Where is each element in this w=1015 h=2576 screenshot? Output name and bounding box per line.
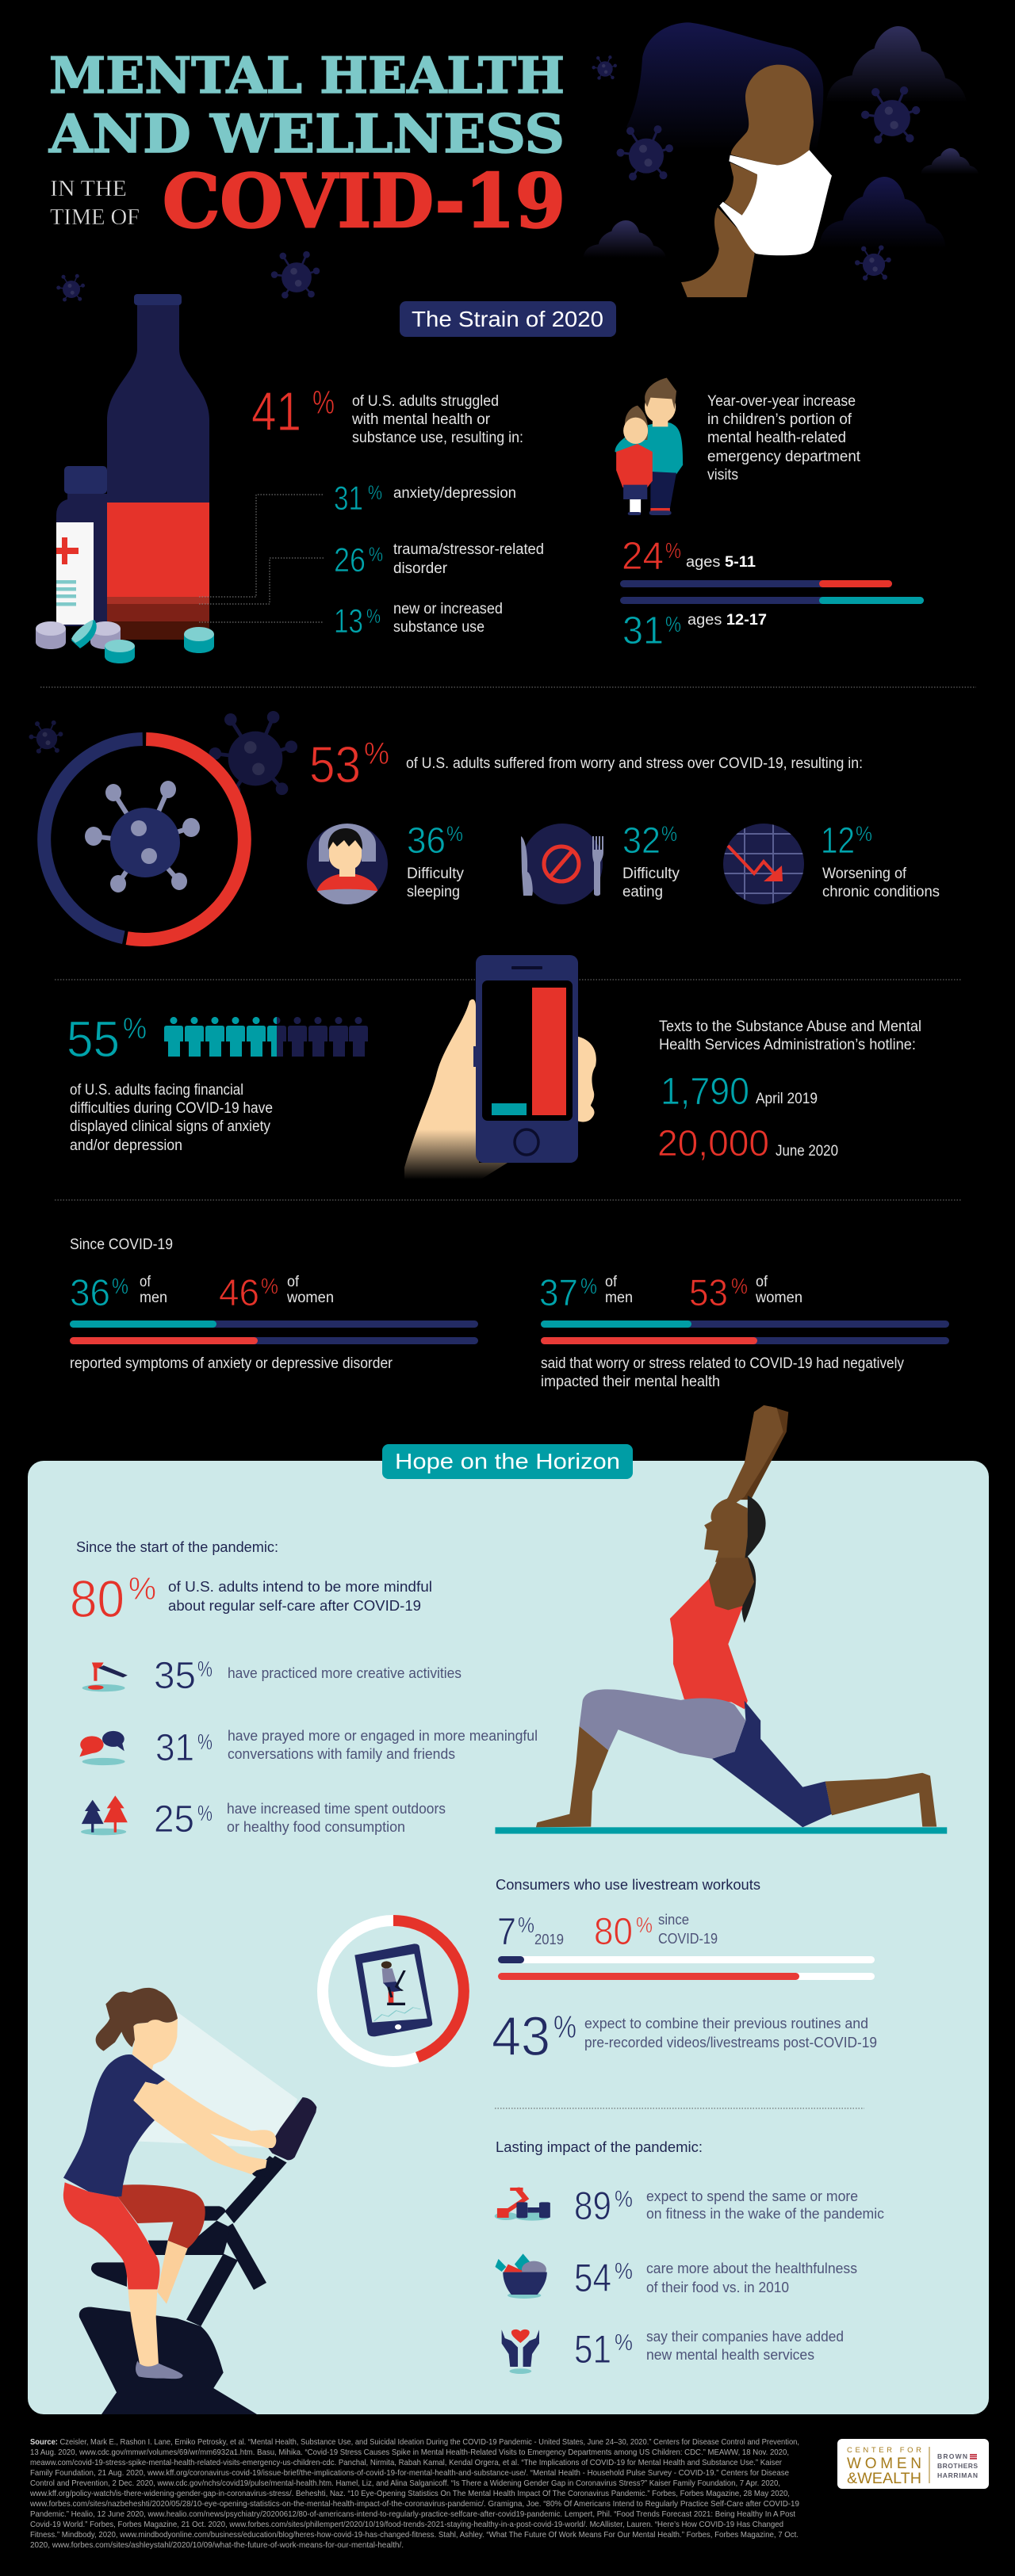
text: year-over-year increase: Year-over-year increase (707, 393, 856, 410)
stat: 51% mental health services: say their companies have added (646, 2328, 844, 2345)
stat: 43% combine routines: expect to combine their previous routines and (584, 2015, 868, 2031)
stat: 54% healthfulness of food: 54 (574, 2256, 611, 2300)
sources text block: Pandemic.” Healio, 12 June 2020, www.healio.com/news/psychiatry/20200612/80-of-americans-intend-to-regularly-practice-selfcare-after-covid19-pandemic. Lempert, Phil. “Food Trends Forecast 2021: Being Healthy In A Post (30, 2509, 795, 2519)
stat: 80% since COVID-19: 80 (594, 1911, 633, 1953)
heading: The Strain of 2020: The Strain of 2020 (412, 307, 603, 331)
stat: 24% ages 5-11: 24 (622, 535, 664, 578)
divider in panel (495, 2108, 864, 2109)
stat: 41% of adults: % (312, 384, 335, 421)
cloud upper right (825, 26, 967, 111)
wine bottle (107, 304, 209, 640)
sources text block: Covid-19 World.” Forbes, Forbes Magazine, 21 Oct. 2020, www.forbes.com/sites/phillempert/2020/10/19/food-trends-2021-staying-healthy-in-a-post-covid-19-world/. McAllister, Lauren. “Here’s How COVID-19 Has Changed (30, 2520, 783, 2529)
stat: 26% trauma: disorder (393, 560, 448, 577)
stat: 54% healthfulness of food: care more about the healthfulness (646, 2260, 857, 2276)
stat: 7% 2019: 2019 (534, 1931, 564, 1947)
stat: 43% combine routines: % (553, 2010, 576, 2045)
stat: 55% financial difficulties: of U.S. adults facing financial (70, 1082, 243, 1099)
comparison: worry or stress: said that worry or stress related to COVID-19 had negatively (541, 1355, 904, 1372)
heading: Hope on the Horizon (382, 1444, 633, 1479)
stat: 32% difficulty eating: % (661, 822, 677, 846)
stat: 7% 2019: 7 (497, 1911, 516, 1953)
stat: 80% self-care (70, 1569, 432, 1628)
stat: 36% difficulty sleeping (407, 820, 464, 900)
viruses (56, 55, 920, 301)
stat: 31% ages 12-17: ages 12-17 (688, 612, 767, 629)
icon: falling health chart (723, 824, 804, 904)
stat: 80% self-care: of U.S. adults intend to be more mindful (168, 1578, 432, 1595)
comparison: worry or stress: 53 (689, 1271, 728, 1313)
stat: 41% of adults: 41 (251, 380, 301, 442)
stat: 31% prayed or conversations (155, 1727, 538, 1769)
stat: 55% financial difficulties: 55 (67, 1011, 120, 1068)
text: since the start of the pandemic: Since the start of the pandemic: (76, 1538, 278, 1555)
stat: 41% of adults: of U.S. adults struggled (352, 393, 499, 410)
panel: Hope on the Horizon (28, 1461, 989, 2414)
stat: 53% worry and stress (309, 736, 863, 793)
stat: 26% trauma: 26 (334, 541, 366, 579)
stat: 7% 2019 (497, 1911, 564, 1953)
viruses behind ring (29, 711, 297, 797)
bar: April 2019 (492, 1103, 527, 1115)
heading: Hope on the Horizon: Hope on the Horizon (395, 1449, 620, 1473)
heading: Since COVID-19: Since COVID-19 (70, 1236, 173, 1253)
comparison: worry or stress: 37 (539, 1271, 578, 1313)
logo: Center for Women & Wealth / Brown Brothers Harriman: BROWN (937, 2452, 967, 2460)
stat: 89% fitness spending: expect to spend the same or more (646, 2188, 858, 2204)
sources text block: www.forbes.com/sites/nazbeheshti/2020/05/28/10-eye-opening-statistics-on-the-mental-health-impact-of-the-coronavirus-pandemic/. Gramigna, Joe. “80% Of Americans Intend to Regularly Practice Self-Care after COVID-19 (29, 2499, 799, 2509)
comparison: anxiety or depressive disorder: reported symptoms of anxiety or depressive disorder (70, 1355, 393, 1372)
icon: hands holding heart (502, 2329, 539, 2374)
stat: 32% difficulty eating (622, 820, 680, 900)
dividers around phone row (55, 980, 961, 1200)
title: MENTAL HEALTH (49, 46, 565, 105)
stat: 25% outdoors: % (197, 1801, 213, 1825)
stat: 53% worry and stress: of U.S. adults suffered from worry and stress over COVID-19, resulting in: (406, 755, 863, 772)
title: IN THE (50, 177, 127, 201)
stat: 80% self-care: about regular self-care after COVID-19 (168, 1597, 421, 1614)
stat: 51% mental health services: new mental health services (646, 2346, 814, 2363)
stat: 25% outdoors: or healthy food consumption (227, 1818, 405, 1835)
comparison: anxiety or depressive disorder: of (140, 1274, 151, 1290)
stat: 24% ages 5-11 (622, 535, 756, 578)
header illustration: clouds, viruses and masked woman (56, 22, 979, 301)
stat: 54% healthfulness of food (574, 2256, 857, 2300)
stat: 41% of adults: substance use, resulting in: (352, 430, 523, 446)
bars: men and women (70, 1320, 478, 1344)
comparison: anxiety or depressive disorder: % (112, 1274, 128, 1298)
stat: 20,000 June 2020: 20,000 (657, 1122, 769, 1164)
stat: 25% outdoors: have increased time spent outdoors (227, 1800, 446, 1817)
stat: 13% substance use: substance use (393, 619, 485, 636)
donut chart: livestream with tablet (323, 1921, 464, 2062)
stat: 12% worsening conditions: 12 (821, 820, 855, 861)
illustration: woman on exercise bike (63, 1988, 316, 2414)
sources text block (29, 2437, 799, 2550)
cloud small right (921, 148, 979, 177)
comparison: worry or stress (539, 1271, 949, 1390)
stat: 13% substance use: new or increased (393, 601, 503, 617)
stat: 32% difficulty eating: 32 (622, 820, 661, 861)
stat: 36% difficulty sleeping: Difficulty (407, 866, 464, 882)
icon: trees (81, 1795, 128, 1835)
text: hotline heading (659, 1019, 921, 1053)
stat: 36% difficulty sleeping: % (446, 822, 463, 846)
stat: 7% 2019: % (518, 1913, 534, 1937)
stat: 80% since COVID-19 (594, 1911, 718, 1953)
comparison: worry or stress: % (580, 1274, 597, 1298)
comparison: anxiety or depressive disorder (70, 1271, 478, 1372)
icon: two children (615, 378, 683, 515)
stat: 80% since COVID-19: since (658, 1911, 689, 1928)
comparison: worry or stress: of (756, 1274, 768, 1290)
text: year-over-year increase: mental health-related (707, 430, 846, 446)
icon: central virus (85, 781, 200, 892)
text: hotline heading: Health Services Administration’s hotline: (659, 1037, 916, 1053)
sources text block: Fitness.” Mindbody, 2020, www.mindbodyonline.com/business/education/blog/heres-how-covid-19-has-changed-fitness. Stahl, Ashley. “What The Future Of Work Means For Our Mental Health.” Forbes, Forbes Magazine, 7 Oct. (30, 2530, 799, 2540)
comparison: worry or stress: % (731, 1274, 748, 1298)
text: year-over-year increase: visits (707, 467, 738, 483)
stat: 1,790 April 2019: 1,790 (661, 1071, 749, 1113)
stat: 31% prayed or conversations: conversations with family and friends (228, 1745, 455, 1762)
far leg (157, 2241, 188, 2304)
stat: 89% fitness spending: 89 (574, 2184, 611, 2228)
head (132, 2019, 178, 2070)
dotted connectors (199, 495, 324, 622)
comparison: worry or stress: men (605, 1290, 633, 1306)
donut chart: 53% with virus (44, 739, 244, 939)
pills (36, 620, 214, 663)
stat: 51% mental health services: % (615, 2330, 633, 2356)
stat: 35% creative activities: 35 (154, 1655, 196, 1697)
comparison: anxiety or depressive disorder: of (287, 1274, 300, 1290)
title: TIME OF (50, 205, 140, 230)
stat: 31% ages 12-17: % (665, 612, 681, 636)
sources text block: Control and Prevention, 2 Dec. 2020, www.cdc.gov/nchs/covid19/pulse/mental-health.htm. Hamel, Liz, and Alina Salganicoff. “Is There a Widening Gender Gap in Coronavirus Stress?” Kaiser Family Foundation, 7 Apr. 2020, (30, 2479, 780, 2488)
stat: 13% substance use (334, 601, 503, 640)
stat: 25% outdoors: 25 (154, 1798, 194, 1840)
icon: plate with prohibition sign (521, 824, 603, 904)
comparison: anxiety or depressive disorder: 46 (219, 1271, 259, 1313)
chart: children bars (620, 580, 924, 604)
stat: 25% outdoors (154, 1798, 446, 1840)
stat: 31% prayed or conversations: 31 (155, 1727, 194, 1769)
heading: The Strain of 2020 (400, 301, 616, 337)
stat: 20,000 June 2020 (657, 1122, 838, 1164)
stat: 55% financial difficulties: % (123, 1012, 147, 1045)
stat: 41% of adults (251, 380, 523, 446)
stat: 55% financial difficulties (67, 1011, 273, 1154)
stat: 13% substance use: % (366, 606, 381, 628)
bars: men and women (541, 1320, 949, 1344)
stat: 89% fitness spending: on fitness in the wake of the pandemic (646, 2205, 884, 2222)
bars: livestream use (498, 1956, 875, 1980)
stat: 1,790 April 2019: April 2019 (756, 1091, 818, 1107)
stat: 31% prayed or conversations: % (197, 1729, 213, 1754)
stat: 31% ages 12-17: 31 (622, 610, 664, 652)
stat: 20,000 June 2020: June 2020 (776, 1143, 838, 1160)
comparison: anxiety or depressive disorder: women (286, 1290, 334, 1306)
stat: 43% combine routines: pre-recorded videos/livestreams post-COVID-19 (584, 2034, 877, 2050)
near leg and shoe (128, 2289, 159, 2369)
stat: 43% combine routines: 43 (492, 2005, 550, 2067)
icon: dumbbells (495, 2188, 550, 2221)
stat: 80% self-care: % (128, 1572, 156, 1607)
logo: Center for Women & Wealth / Brown Brothers Harriman: &WEALTH (847, 2471, 921, 2487)
logo: Center for Women & Wealth / Brown Brothers Harriman: WOMEN (847, 2456, 921, 2472)
stat: 12% worsening conditions: % (856, 822, 872, 846)
bar: June 2020 (532, 988, 566, 1115)
stat: 31% anxiety/depression: anxiety/depression (393, 485, 516, 502)
stat: 26% trauma: trauma/stressor-related (393, 541, 544, 558)
stat: 35% creative activities: have practiced more creative activities (228, 1664, 462, 1681)
heading: lasting impact: Lasting impact of the pandemic: (496, 2138, 703, 2155)
stat: 51% mental health services (574, 2327, 844, 2372)
icon: tablet with cycling figure (354, 1943, 432, 2036)
sources text block: Family Foundation, 21 Aug. 2020, www.kff.org/coronavirus-covid-19/issue-brief/the-implications-of-covid-19-for-mental-health-and-substance-use/. “Mental Health - Household Pulse Survey - COVID-19.” Centers for Disease (30, 2468, 789, 2478)
logo: Center for Women & Wealth / Brown Brothers Harriman: HARRIMAN (937, 2471, 978, 2479)
logo: Center for Women & Wealth / Brown Brothers Harriman (837, 2439, 989, 2489)
heading: consumers who use livestream workouts: Consumers who use livestream workouts (496, 1876, 760, 1893)
stat: 31% anxiety/depression: 31 (334, 480, 363, 518)
comparison: worry or stress: impacted their mental health (541, 1374, 720, 1390)
stat: 35% creative activities (154, 1655, 462, 1697)
illustration: hand holding phone with bar chart (404, 955, 596, 1183)
logo: Center for Women & Wealth / Brown Brothers Harriman: CENTER FOR (847, 2446, 921, 2455)
stat: 55% financial difficulties: and/or depression (70, 1137, 182, 1154)
icon: bowl of food (495, 2253, 547, 2299)
illustration: woman in yoga lunge on mat (495, 1405, 947, 1834)
stat: 12% worsening conditions (821, 820, 940, 900)
comparison: anxiety or depressive disorder: 36 (70, 1271, 110, 1313)
stat: 89% fitness spending: % (615, 2187, 633, 2212)
title (48, 46, 565, 244)
sources text block: Source: Czeisler, Mark E., Rashon I. Lane, Emiko Petrosky, et al. “Mental Health, Substance Use, and Suicidal Ideation During the COVID-19 Pandemic - United States, June 24–30, 2020.” Centers for Disease Control and Prevention, (30, 2437, 799, 2447)
stat: 53% worry and stress: % (364, 737, 389, 771)
icon: speech bubbles (79, 1731, 125, 1765)
stat: 32% difficulty eating: Difficulty (622, 866, 680, 882)
cloud lower left (583, 220, 667, 262)
sources text block: 2020, www.forbes.com/sites/ashleystahl/2020/10/09/what-the-future-of-work-means-for-our-mental-health/. (30, 2540, 404, 2550)
stat: 26% trauma (334, 541, 544, 579)
stat: 32% difficulty eating: eating (622, 884, 663, 900)
stat: 26% trauma: % (369, 544, 383, 566)
sources text block: www.kff.org/policy-watch/is-there-widening-gender-gap-in-coronavirus-stress/. Beheshti, Naz. “10 Eye-Opening Statistics On The Mental Health Impact Of The Coronavirus Pandemic.” Forbes, Forbes Magazine, 28 May 2020, (29, 2489, 790, 2498)
stat: 1,790 April 2019 (661, 1071, 818, 1113)
stat: 31% anxiety/depression: % (368, 482, 382, 504)
stat: 80% since COVID-19: COVID-19 (658, 1930, 718, 1947)
icon: paint brush (82, 1662, 128, 1691)
title: COVID-19 (163, 158, 565, 244)
stat: 24% ages 5-11: % (665, 538, 681, 563)
medicine bottle (56, 494, 107, 626)
stat: 51% mental health services: 51 (574, 2327, 611, 2372)
sources text block: meaww.com/covid-19-stress-spike-mental-health-related-visits-emergency-us-children-cdc. Panchal, Nirmita, Rabah Kamal, Kendal Orgera, et al. “The Implications of COVID-19 for Mental Health and Substance Use.” Kaiser (30, 2458, 782, 2467)
stat: 31% prayed or conversations: have prayed more or engaged in more meaningful (228, 1727, 538, 1744)
sources text block: 13 Aug. 2020, www.cdc.gov/mmwr/volumes/69/wr/mm6932a1.htm. Basu, Mihika. “Covid-19 Stress Causes Spike in Mental Health-Related Visits to Emergency Departments among US Children: CDC.” MEAWW, 18 Nov. 2020, (30, 2448, 789, 2457)
comparison: worry or stress: women (755, 1290, 802, 1306)
stat: 13% substance use: 13 (334, 602, 363, 640)
stat: 80% self-care: 80 (70, 1569, 124, 1628)
stat: 55% financial difficulties: displayed clinical signs of anxiety (70, 1118, 270, 1135)
stat: 35% creative activities: % (197, 1657, 213, 1681)
text: hotline heading: Texts to the Substance Abuse and Mental (659, 1019, 921, 1035)
text: year-over-year increase (707, 393, 861, 483)
pictogram: 10 people, 5.5 highlighted (164, 1017, 368, 1057)
stat: 54% healthfulness of food: % (615, 2259, 633, 2284)
comparison: anxiety or depressive disorder: % (261, 1274, 278, 1298)
stat: 53% worry and stress: 53 (309, 736, 361, 793)
stat: 36% difficulty sleeping: sleeping (407, 884, 460, 900)
divider 1 (40, 686, 976, 688)
comparison: anxiety or depressive disorder: men (140, 1290, 167, 1306)
bike frame (79, 2156, 287, 2414)
woman with face mask (617, 22, 832, 297)
logo: Center for Women & Wealth / Brown Brothers Harriman: BROTHERS (937, 2462, 978, 2470)
stat: 31% anxiety/depression (334, 480, 516, 518)
stat: 54% healthfulness of food: of their food vs. in 2010 (646, 2279, 789, 2295)
stat: 55% financial difficulties: difficulties during COVID-19 have (70, 1100, 273, 1117)
cloud lower right (819, 177, 946, 252)
torso (63, 2054, 165, 2197)
icon: sleepless person (305, 824, 389, 908)
arms (133, 2079, 276, 2174)
text: year-over-year increase: emergency department (707, 449, 861, 465)
stat: 31% ages 12-17 (622, 610, 767, 652)
title: AND WELLNESS (48, 103, 565, 165)
stat: 80% since COVID-19: % (636, 1913, 653, 1937)
illustration: bottles and pills (36, 294, 214, 663)
stat: 12% worsening conditions: chronic conditions (822, 884, 940, 900)
stat: 89% fitness spending (574, 2184, 884, 2228)
stat: 41% of adults: with mental health or (351, 411, 491, 428)
light beam from screen (137, 2012, 297, 2148)
stat: 12% worsening conditions: Worsening of (822, 866, 907, 882)
stat: 43% combine routines (492, 2005, 877, 2067)
stat: 24% ages 5-11: ages 5-11 (686, 554, 756, 571)
stat: 36% difficulty sleeping: 36 (407, 820, 446, 861)
text: year-over-year increase: in children’s portion of (707, 411, 852, 428)
comparison: worry or stress: of (605, 1274, 618, 1290)
